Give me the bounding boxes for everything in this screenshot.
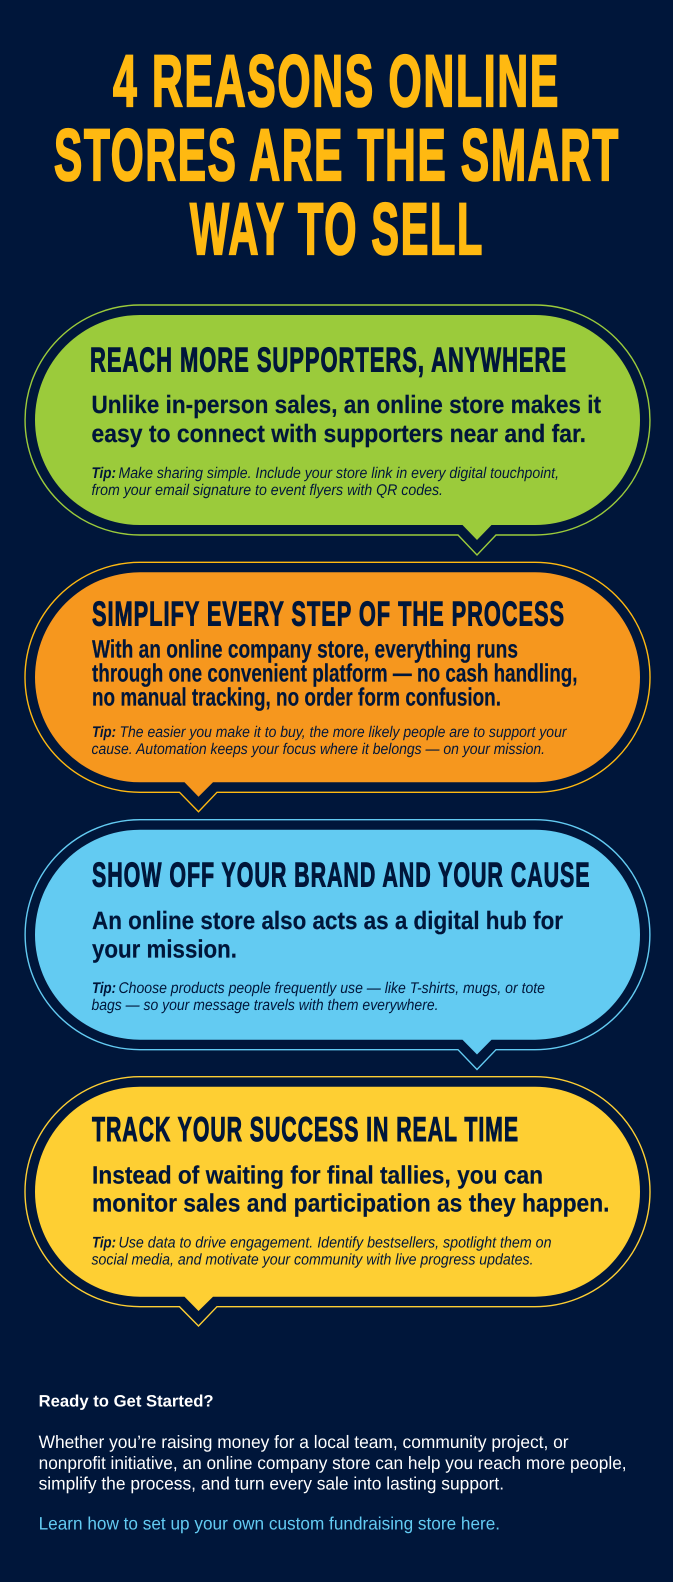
body text [92,636,578,712]
tip: Tip: [92,465,116,482]
body text: An online store also acts as a digital hub for [92,907,563,935]
footer [39,1393,627,1533]
tip: Tip: [92,1235,116,1252]
tip: bags — so your message travels with them everywhere. [92,997,438,1014]
speech bubble fill: yellow [35,1087,640,1311]
tip: Choose products people frequently use — like T-shirts, mugs, or tote [118,980,545,997]
tip [92,465,559,499]
tip: Tip: [92,980,116,997]
body text: monitor sales and participation as they happen. [92,1190,610,1218]
panel: simplify every step [25,562,650,812]
tip: The easier you make it to buy, the more likely people are to support your [120,724,567,741]
body text: no manual tracking, no order form confusion. [92,684,501,712]
tip: Tip: [92,724,116,741]
tip: social media, and motivate your community with live progress updates. [92,1251,534,1268]
body text: your mission. [92,935,237,963]
footer paragraph [39,1432,627,1493]
panel: show off your brand [25,820,650,1070]
speech bubble fill: orange [35,572,640,797]
speech bubble outline: orange [25,562,650,812]
speech bubble outline: green [25,305,650,555]
tip: Make sharing simple. Include your store link in every digital touchpoint, [118,465,559,482]
footer heading: Ready to Get Started? [39,1393,214,1411]
body text [92,1161,610,1218]
footer paragraph: Whether you’re raising money for a local team, community project, or [39,1432,569,1452]
tip: from your email signature to event flyers with QR codes. [92,482,443,499]
speech bubble fill: blue [35,830,640,1054]
panel: track your success [25,1077,650,1326]
tip [92,1235,552,1268]
body text [92,391,602,448]
speech bubble outline: yellow [25,1077,650,1326]
tip: Use data to drive engagement. Identify bestsellers, spotlight them on [118,1235,552,1252]
footer paragraph: simplify the process, and turn every sale into lasting support. [39,1473,504,1493]
footer link: Learn how to set up your own custom fundraising store here. [39,1513,500,1533]
body text: Unlike in-person sales, an online store makes it [92,391,602,419]
body text [92,907,563,963]
body text: easy to connect with supporters near and far. [92,420,586,448]
tip: cause. Automation keeps your focus where it belongs — on your mission. [92,741,545,758]
body text: With an online company store, everything runs [92,636,518,664]
tip [92,724,567,758]
footer paragraph: nonprofit initiative, an online company store can help you reach more people, [39,1453,627,1473]
speech bubble outline: blue [25,820,650,1070]
panel: reach more supporters [25,305,650,555]
tip [92,980,545,1014]
speech bubble fill: green [35,315,640,540]
title [54,41,620,270]
body text: Instead of waiting for final tallies, you can [92,1161,543,1189]
